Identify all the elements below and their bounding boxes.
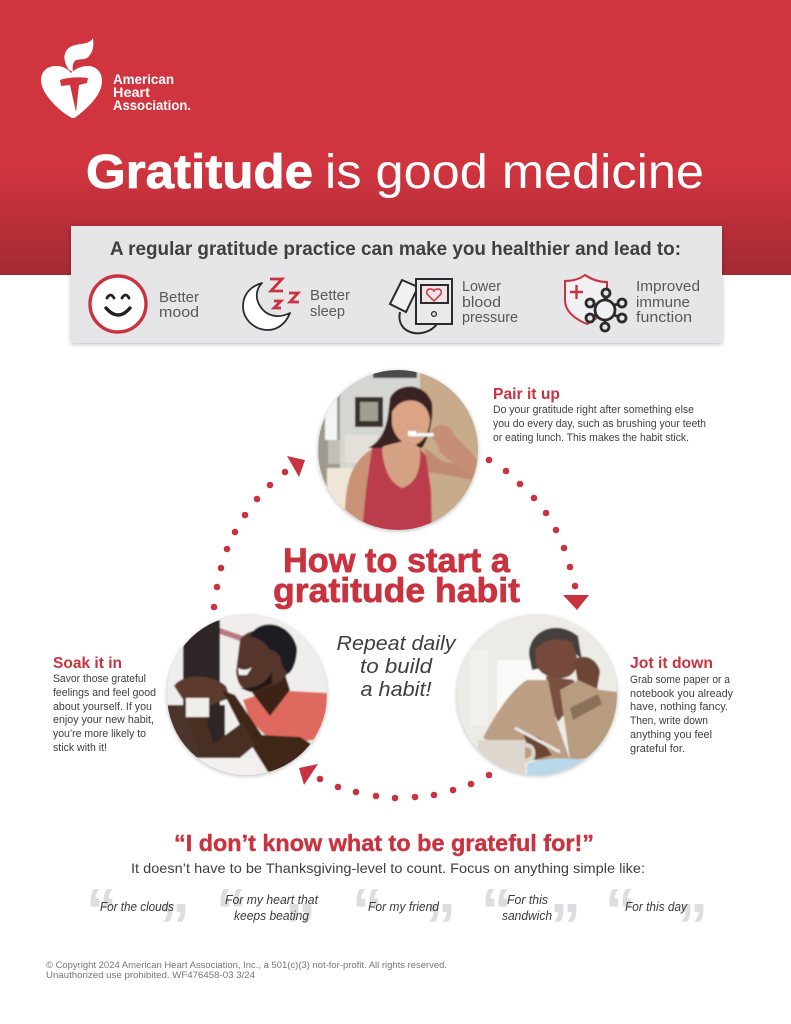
copyright	[46, 960, 447, 981]
title: is good medicine	[325, 146, 704, 199]
center note: a habit!	[360, 679, 432, 701]
logo: American Heart Association	[41, 38, 191, 118]
label: lower blood pressure	[462, 278, 518, 326]
label: better sleep: sleep	[310, 303, 345, 320]
center heading	[273, 542, 520, 610]
bottom heading: “I don’t know what to be grateful for!”	[174, 830, 594, 856]
label: improved immune function: function	[636, 309, 692, 326]
label: improved immune function: Improved	[636, 278, 700, 295]
text: jot it down	[630, 655, 733, 755]
label: better mood: mood	[159, 304, 199, 321]
label: better sleep	[310, 287, 350, 320]
title: Gratitude	[86, 146, 313, 199]
text: pair it up: you do every day, such as brushing your teeth	[493, 418, 706, 430]
text: jot it down: have, nothing fancy.	[630, 701, 728, 713]
icon: shield and immune cell	[565, 275, 626, 331]
arrow: photo 3 to photo 2	[299, 764, 492, 801]
photo: woman brushing teeth	[318, 368, 480, 532]
photo: man with mug	[167, 615, 327, 778]
quote: for the clouds	[86, 877, 190, 961]
quote: for this sandwich	[481, 877, 581, 961]
quote: for this day: “	[605, 877, 636, 946]
label: better sleep: Better	[310, 287, 350, 304]
text: soak it in	[53, 655, 156, 754]
text: soak it in: Savor those grateful	[53, 673, 146, 685]
quote: for this day	[605, 877, 708, 961]
text: jot it down: anything you feel	[630, 729, 712, 741]
text: jot it down: Then, write down	[630, 715, 708, 727]
quote: for my friend	[352, 877, 456, 961]
icon: blood pressure monitor	[390, 279, 452, 333]
quote: for this sandwich: sandwich	[502, 909, 552, 923]
bottom subheading: It doesn’t have to be Thanksgiving-level to count. Focus on anything simple like:	[131, 860, 645, 876]
text: pair it up: Do your gratitude right after something else	[493, 404, 694, 416]
quote: for my heart: ”	[285, 892, 316, 961]
copyright: Unauthorized use prohibited. WF476458-03 3/24	[46, 970, 255, 981]
label: lower blood pressure: pressure	[462, 309, 518, 326]
logo: American Heart Association: American	[113, 72, 174, 87]
text: jot it down: Grab some paper or a	[630, 674, 731, 686]
quote: for my friend: ”	[425, 892, 456, 961]
text: soak it in: you’re more likely to	[53, 728, 146, 740]
quote: for this sandwich: For this	[507, 893, 548, 907]
panel: benefits	[71, 226, 722, 343]
copyright: © Copyright 2024 American Heart Association, Inc., a 501(c)(3) not-for-profit. All rights reserved.	[46, 960, 447, 971]
text: jot it down: grateful for.	[630, 743, 685, 755]
quote: for my friend: For my friend	[368, 900, 440, 914]
text: pair it up: or eating lunch. This makes the habit stick.	[493, 432, 689, 444]
title	[86, 146, 704, 199]
label: lower blood pressure: blood	[462, 294, 501, 311]
logo: American Heart Association: Heart	[113, 85, 151, 100]
label: better mood	[159, 289, 199, 321]
icon: moon and zzz	[243, 279, 299, 330]
text: pair it up: Pair it up	[493, 386, 560, 403]
center heading: gratitude habit	[273, 572, 520, 610]
label: better mood: Better	[159, 289, 199, 306]
arrow: photo 2 to photo 1	[211, 456, 305, 610]
center heading: How to start a	[283, 542, 511, 580]
text: soak it in: Soak it in	[53, 655, 122, 672]
center note: to build	[360, 656, 433, 678]
quote: for this day: For this day	[625, 900, 688, 914]
center note: Repeat daily	[336, 633, 457, 655]
arrow: photo 1 to photo 3	[486, 457, 589, 610]
panel heading: A regular gratitude practice can make you healthier and lead to:	[110, 239, 681, 260]
quote: for this sandwich: “	[481, 877, 512, 946]
text: pair it up	[493, 386, 706, 444]
text: jot it down: notebook you already	[630, 688, 733, 700]
quote: for my heart: For my heart that	[225, 893, 318, 907]
icon: smile	[90, 276, 146, 332]
photo: woman writing in notebook	[457, 615, 618, 778]
text: soak it in: about yourself. If you	[53, 701, 152, 713]
quote: for the clouds: ”	[159, 892, 190, 961]
quote: for my heart	[216, 877, 318, 961]
center note	[336, 633, 457, 701]
label: lower blood pressure: Lower	[462, 278, 501, 295]
quote: for my friend: “	[352, 877, 383, 946]
text: soak it in: feelings and feel good	[53, 687, 156, 699]
text: soak it in: enjoy your new habit,	[53, 714, 154, 726]
header background	[0, 0, 791, 275]
quote: for this day: ”	[677, 892, 708, 961]
quote: for the clouds: For the clouds	[100, 900, 174, 914]
text: jot it down: Jot it down	[630, 655, 713, 672]
quote: for this sandwich: ”	[550, 892, 581, 961]
quote: for the clouds: “	[86, 877, 117, 946]
label: improved immune function: immune	[636, 294, 690, 311]
quote: for my heart: “	[216, 877, 247, 946]
quote: for my heart: keeps beating	[234, 909, 309, 923]
text: soak it in: stick with it!	[53, 742, 107, 754]
logo: American Heart Association: Association.	[113, 98, 191, 113]
label: improved immune function	[636, 278, 700, 326]
